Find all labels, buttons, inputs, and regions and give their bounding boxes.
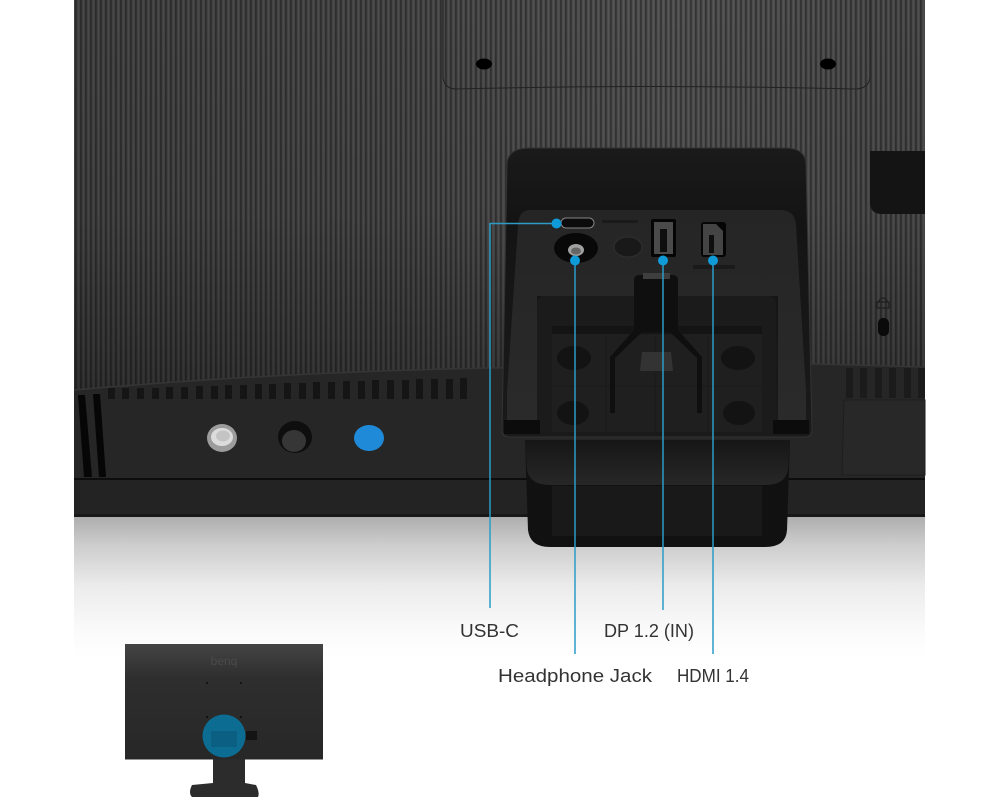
Kensington lock slot [878,318,889,336]
DP port [651,219,676,257]
thumbnail lock mark [246,731,257,740]
callout: USB-C: USB-C [460,621,519,641]
lock icon [877,298,889,308]
right cutout [870,151,925,214]
ribbed rear shell [74,0,925,392]
ventilation slots right [846,368,925,398]
blue power button [354,425,384,451]
printed port marks [602,220,735,269]
USB-C port [561,218,594,228]
VESA screw holes [476,58,836,70]
callout: DP 1.2 (IN): DP 1.2 (IN) [604,621,694,641]
light sensor button [207,424,237,452]
thumbnail screen back [125,644,323,760]
cable compartment [502,148,812,437]
thumbnail highlight circle [202,714,246,758]
thumbnail holes [206,682,242,718]
thumbnail stand [190,755,259,797]
bottom bezel [74,478,925,517]
thumbnail: full monitor rear [125,644,323,797]
monitor rear close-up [74,0,925,517]
port plate [507,210,806,420]
callout: USB-C [460,218,562,641]
dark side slots [78,394,106,477]
lower housing band [74,364,925,480]
screw [614,237,642,257]
joystick button [278,421,312,453]
cable clip [610,273,702,413]
compartment corner feet [504,420,809,434]
callout: HDMI 1.4 [677,256,749,686]
ventilation slots left [108,378,467,399]
floor shadow beneath monitor [74,517,925,657]
HDMI port [701,222,726,257]
thumbnail logo: benq [211,654,237,668]
VESA plate outline [443,0,870,89]
recessed mounting area [537,296,776,432]
callouts [460,218,749,686]
mounting holes [557,346,755,425]
stand neck base [525,440,790,547]
callout: Headphone Jack [498,256,653,686]
callout: HDMI 1.4: HDMI 1.4 [677,666,749,686]
compartment outer housing [502,148,812,437]
callout: DP 1.2 (IN) [604,256,694,641]
headphone jack port [554,233,598,263]
right recessed panel [842,400,925,475]
callout: Headphone Jack: Headphone Jack [498,666,653,686]
